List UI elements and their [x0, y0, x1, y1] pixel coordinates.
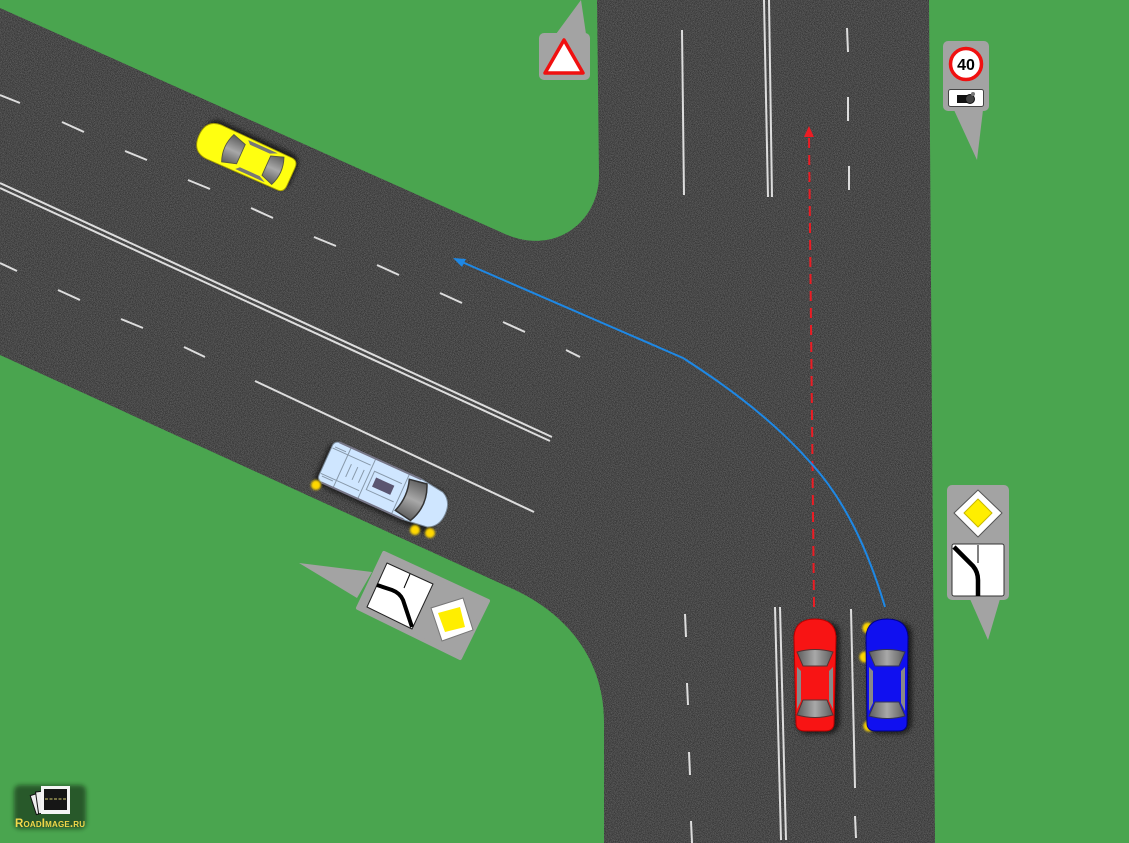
- arrow: blue turning path: [453, 258, 885, 607]
- sign post: priority road with layout: [947, 485, 1009, 640]
- turn signals: van: [311, 480, 435, 538]
- car: blue: [866, 619, 912, 734]
- sign post: yield triangle: [539, 0, 590, 80]
- arrow: red dashed straight path: [804, 126, 814, 607]
- logo: RoadImage.ru: [14, 785, 86, 830]
- van: light blue: [312, 439, 454, 538]
- logo icon: photo stack: [30, 786, 70, 815]
- sign post: speed limit 40 with camera: [943, 41, 989, 160]
- turn signals: blue car: [860, 622, 874, 732]
- sign post: rotated priority road with layout: [299, 553, 488, 658]
- sign post: speed limit 40 with camera: 40: [957, 57, 975, 74]
- car: yellow: [191, 115, 302, 194]
- car: red: [794, 619, 840, 734]
- logo text: RoadImage.ru: [15, 818, 85, 830]
- road markings: [0, 0, 856, 843]
